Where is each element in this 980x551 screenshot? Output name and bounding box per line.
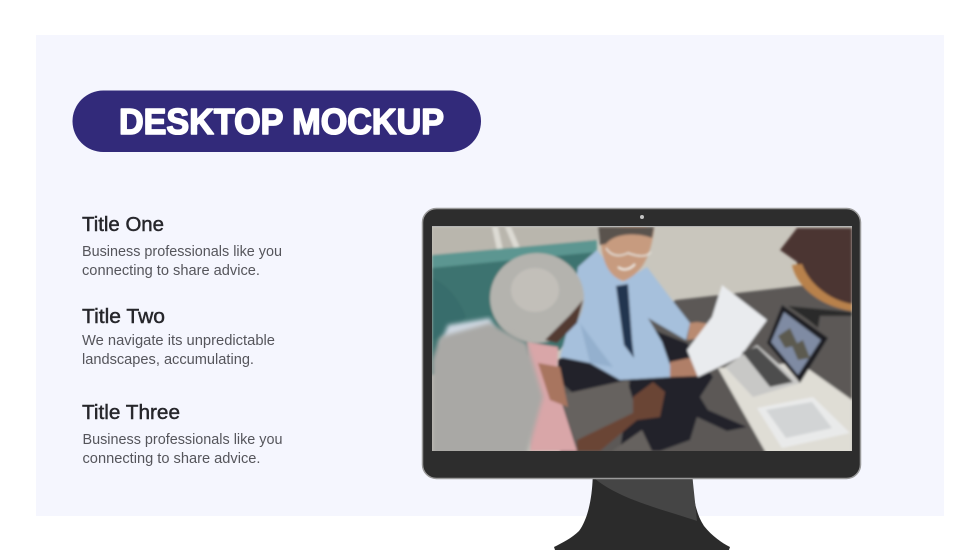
glasses xyxy=(606,248,651,256)
text block: title one: Business professionals like you xyxy=(82,243,282,260)
title pill: DESKTOP MOCKUP xyxy=(119,101,444,142)
man's hands xyxy=(686,320,708,342)
monitor body xyxy=(422,208,860,478)
text block: title one: connecting to share advice. xyxy=(82,262,260,279)
sofa xyxy=(432,240,597,375)
text block: title two: We navigate its unpredictable xyxy=(82,332,275,349)
foreground white hair xyxy=(432,323,543,455)
text block: title three xyxy=(82,402,282,467)
text block: title one: Title One xyxy=(82,214,164,236)
paper on table xyxy=(757,397,850,448)
text block: title three: connecting to share advice. xyxy=(82,450,260,467)
smile xyxy=(618,264,635,269)
text block: title three: Title Three xyxy=(82,402,180,424)
foreground white shoulder xyxy=(440,318,495,350)
woman's hair xyxy=(490,253,584,343)
woman pink top xyxy=(527,342,577,451)
man trousers xyxy=(558,320,747,451)
man head xyxy=(601,226,654,281)
webcam xyxy=(640,215,644,219)
text block: title two: Title Two xyxy=(82,306,165,328)
laptop xyxy=(725,345,800,397)
text block: title two: landscapes, accumulating. xyxy=(82,351,254,368)
monitor stand xyxy=(554,478,730,550)
screen photo xyxy=(432,226,852,460)
woman trousers xyxy=(566,380,634,440)
text block: title two xyxy=(82,306,275,368)
top screen line xyxy=(432,226,852,228)
hand on shoulder xyxy=(538,363,568,407)
desktop monitor xyxy=(422,208,860,550)
document xyxy=(687,285,767,377)
chair xyxy=(780,228,852,307)
carpet xyxy=(560,280,852,460)
man shirt xyxy=(560,250,690,380)
text block: title one xyxy=(82,214,282,279)
text block: title three: Business professionals like you xyxy=(82,431,282,448)
title pill xyxy=(72,90,481,152)
table xyxy=(718,363,852,460)
tie xyxy=(616,284,634,358)
woman's arm xyxy=(577,382,665,451)
